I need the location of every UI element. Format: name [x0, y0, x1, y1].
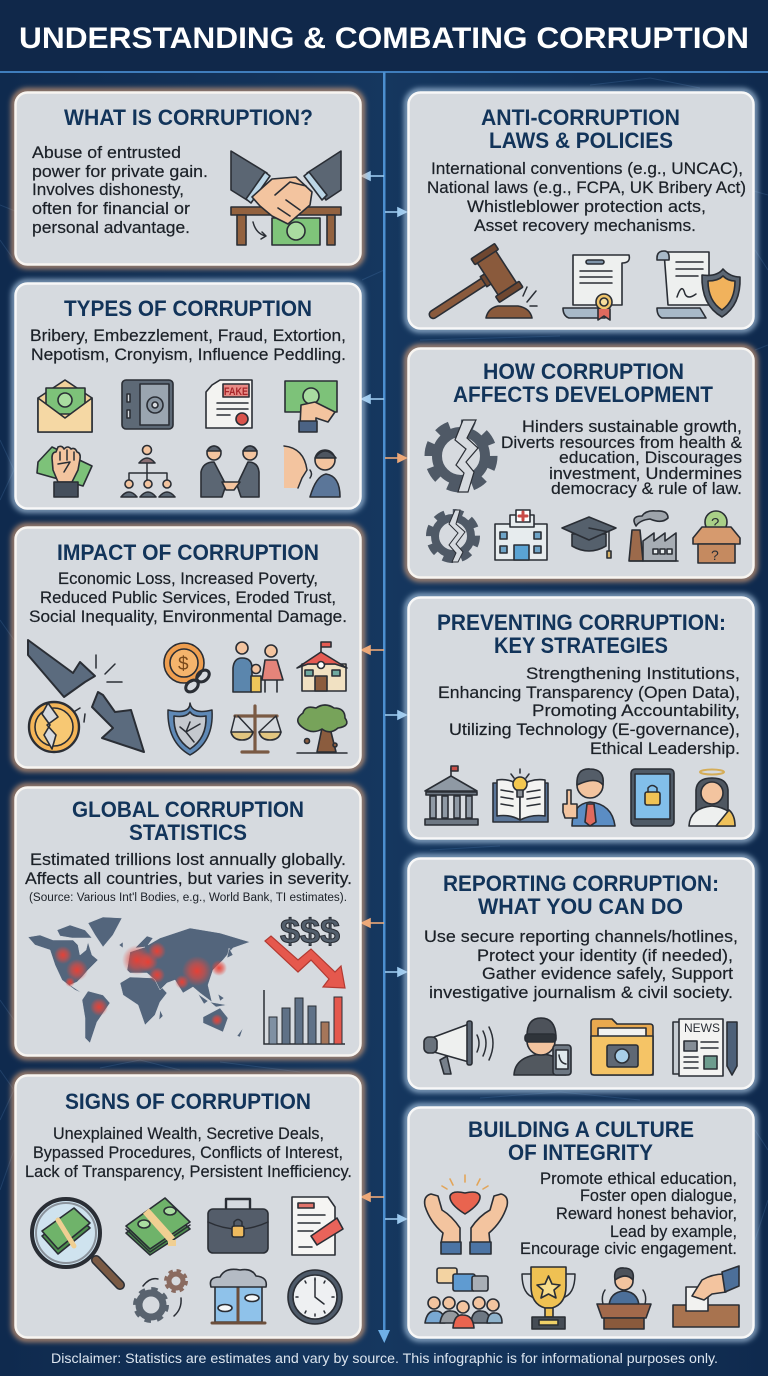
description: Whistleblower protection acts,: [467, 197, 706, 216]
description: [32, 143, 208, 237]
heading: [468, 1117, 694, 1165]
panel: how corruption affects development: [407, 347, 755, 579]
heading: [481, 105, 680, 153]
panel: reporting corruption: [407, 857, 755, 1090]
icon: leader at podium: [597, 1268, 651, 1329]
description: [25, 1124, 352, 1181]
description: Economic Loss, Increased Poverty,: [58, 569, 318, 588]
icon: newspaper and pen: NEWS: [684, 1021, 720, 1035]
icon: hands holding heart: [425, 1175, 507, 1254]
icon: institution building: [425, 766, 478, 825]
description: Social Inequality, Environmental Damage.: [29, 607, 347, 626]
panel: signs of corruption: [14, 1074, 362, 1339]
icon: diploma: [563, 255, 629, 320]
description: Use secure reporting channels/hotlines,: [424, 927, 738, 946]
description: [501, 417, 743, 498]
heading: STATISTICS: [129, 820, 247, 845]
icon: newspaper and pen: [673, 1019, 737, 1076]
icon: document with shield: [657, 251, 740, 318]
icon: ballot box with question: ?: [711, 515, 719, 532]
description: Estimated trillions lost annually globally.: [30, 850, 346, 869]
description: Lack of Transparency, Persistent Inefficiency.: [25, 1162, 352, 1181]
icon: open book with lightbulb: [493, 769, 548, 822]
description: Affects all countries, but varies in severity.: [25, 869, 352, 888]
heading: HOW CORRUPTION: [483, 359, 684, 384]
icon: cracked coin: [29, 702, 79, 752]
description: Lead by example,: [610, 1222, 737, 1241]
description: Reward honest behavior,: [556, 1204, 737, 1223]
icon: hand casting ballot: [673, 1266, 739, 1327]
heading: SIGNS OF CORRUPTION: [65, 1089, 311, 1114]
description: personal advantage.: [32, 218, 190, 237]
icon: cash stack: [126, 1198, 190, 1255]
icon: coin and chain: [164, 643, 212, 694]
icon: locked briefcase: [208, 1199, 268, 1253]
heading: GLOBAL CORRUPTION: [72, 797, 304, 822]
panel: impact of corruption: [14, 526, 362, 769]
heading: IMPACT OF CORRUPTION: [57, 540, 319, 565]
icon: polluting factory: [629, 511, 678, 561]
description: investigative journalism & civil society.: [429, 983, 733, 1002]
description: Foster open dialogue,: [580, 1186, 737, 1205]
icon: anonymous whistleblower with phone: [514, 1018, 571, 1075]
description: education, Discourages: [559, 448, 742, 467]
icon: damaged tree: [297, 705, 347, 753]
description: Gather evidence safely, Support: [482, 964, 733, 983]
icon: org chart nepotism: [121, 446, 175, 497]
icon: fake document: FAKE: [224, 386, 248, 398]
description: Utilizing Technology (E-governance),: [449, 720, 740, 739]
icon: cracked shield: [168, 703, 212, 755]
heading: LAWS & POLICIES: [489, 128, 673, 153]
description: [438, 664, 740, 758]
icon: ballot box with question: [693, 511, 740, 563]
description: Unexplained Wealth, Secretive Deals,: [53, 1124, 324, 1143]
icon: gears: [136, 1272, 186, 1320]
heading: [443, 871, 719, 919]
icon: small broken gear: [430, 510, 476, 562]
icon: scales of justice: [231, 706, 281, 752]
heading: ANTI-CORRUPTION: [481, 105, 680, 130]
icon: secure tablet: [631, 769, 674, 826]
icon: redacted document: [292, 1197, 343, 1255]
description: Involves dishonesty,: [32, 180, 184, 199]
icon: graduation cap: [562, 517, 616, 558]
icon: money envelope: [38, 380, 92, 432]
heading: AFFECTS DEVELOPMENT: [453, 382, 714, 407]
description: Abuse of entrusted: [32, 143, 181, 162]
description: Strengthening Institutions,: [526, 664, 740, 683]
description: Bribery, Embezzlement, Fraud, Extortion,: [30, 326, 346, 345]
icon: cronyism handshake: [201, 446, 259, 497]
central timeline with arrows: [362, 72, 406, 1343]
description: Protect your identity (if needed),: [477, 946, 733, 965]
description: often for financial or: [32, 199, 190, 218]
icon: magnifier over cash: [32, 1199, 120, 1285]
heading: REPORTING CORRUPTION:: [443, 871, 719, 896]
heading: [437, 610, 726, 658]
description: Promoting Accountability,: [532, 701, 740, 720]
panel: what is corruption: [14, 91, 362, 266]
heading: WHAT YOU CAN DO: [478, 894, 683, 919]
description: democracy & rule of law.: [551, 479, 742, 498]
description: Reduced Public Services, Eroded Trust,: [40, 588, 336, 607]
description: investment, Undermines: [549, 464, 742, 483]
icon: coin and chain: $: [178, 654, 189, 675]
panel: preventing corruption key strategies: [407, 596, 755, 840]
falling money arrow: [265, 913, 345, 988]
description: [427, 159, 746, 235]
icon: broken down arrow: [28, 640, 144, 752]
icon: hospital: [495, 510, 547, 560]
heading: TYPES OF CORRUPTION: [64, 296, 312, 321]
description: Enhancing Transparency (Open Data),: [438, 683, 740, 702]
icon: ballot box with question: ?: [711, 547, 719, 563]
header band: [0, 0, 768, 71]
description: [25, 850, 352, 904]
icon: handshake over bribe: [231, 151, 341, 245]
bar chart: [264, 990, 345, 1044]
panel: types of corruption: [14, 282, 362, 510]
icon: clock: [288, 1270, 342, 1324]
heading: KEY STRATEGIES: [494, 633, 668, 658]
panel: building a culture of integrity: [407, 1106, 755, 1339]
description: [520, 1169, 737, 1258]
description: power for private gain.: [32, 162, 208, 181]
description: Ethical Leadership.: [590, 739, 740, 758]
icon: safe: [122, 380, 173, 429]
icon: gavel: [416, 244, 537, 338]
heading: WHAT IS CORRUPTION?: [64, 105, 313, 130]
heading: OF INTEGRITY: [508, 1140, 653, 1165]
icon: hand with cash: [285, 381, 337, 432]
description: Encourage civic engagement.: [520, 1239, 737, 1258]
description: (Source: Various Int'l Bodies, e.g., World Bank, TI estimates).: [29, 892, 347, 904]
icon: family: [233, 642, 283, 692]
heading: PREVENTING CORRUPTION:: [437, 610, 726, 635]
icon: public school: [297, 642, 347, 691]
description: [29, 569, 347, 626]
icon: accountable man: [563, 769, 615, 826]
description: International conventions (e.g., UNCAC),: [431, 159, 743, 178]
world map with hotspots: [28, 917, 250, 1043]
description: [424, 927, 738, 1002]
panel: global corruption statistics: [14, 786, 362, 1057]
icon: evidence folder with camera: [591, 1019, 653, 1075]
description: Hinders sustainable growth,: [522, 417, 742, 436]
description: National laws (e.g., FCPA, UK Bribery Act): [427, 178, 746, 197]
icon: ethical leader with halo: [689, 770, 735, 826]
icon: megaphone: [424, 1021, 493, 1074]
title: UNDERSTANDING & COMBATING CORRUPTION: [19, 22, 749, 55]
heading: [453, 359, 714, 407]
description: Nepotism, Cronyism, Influence Peddling.: [31, 345, 346, 364]
description: [30, 326, 346, 364]
description: Diverts resources from health &: [501, 433, 743, 452]
heading: BUILDING A CULTURE: [468, 1117, 694, 1142]
description: Asset recovery mechanisms.: [474, 216, 696, 235]
panel: anti-corruption laws and policies: [407, 91, 755, 338]
icon: fist with cash: [37, 446, 92, 497]
icon: large broken gear: [430, 420, 492, 492]
description: Bypassed Procedures, Conflicts of Interest,: [33, 1143, 343, 1162]
disclaimer: Disclaimer: Statistics are estimates and vary by source. This infographic is for informational purposes only.: [51, 1350, 718, 1366]
icon: open dialogue group: [425, 1268, 502, 1328]
icon: fake document: [206, 380, 252, 428]
heading: [72, 797, 304, 845]
icon: trophy: [522, 1267, 575, 1329]
description: Promote ethical education,: [540, 1169, 737, 1188]
falling money arrow: $$$: [280, 913, 340, 951]
icon: whisper: [284, 446, 340, 497]
icon: cloudy window: [210, 1269, 266, 1323]
